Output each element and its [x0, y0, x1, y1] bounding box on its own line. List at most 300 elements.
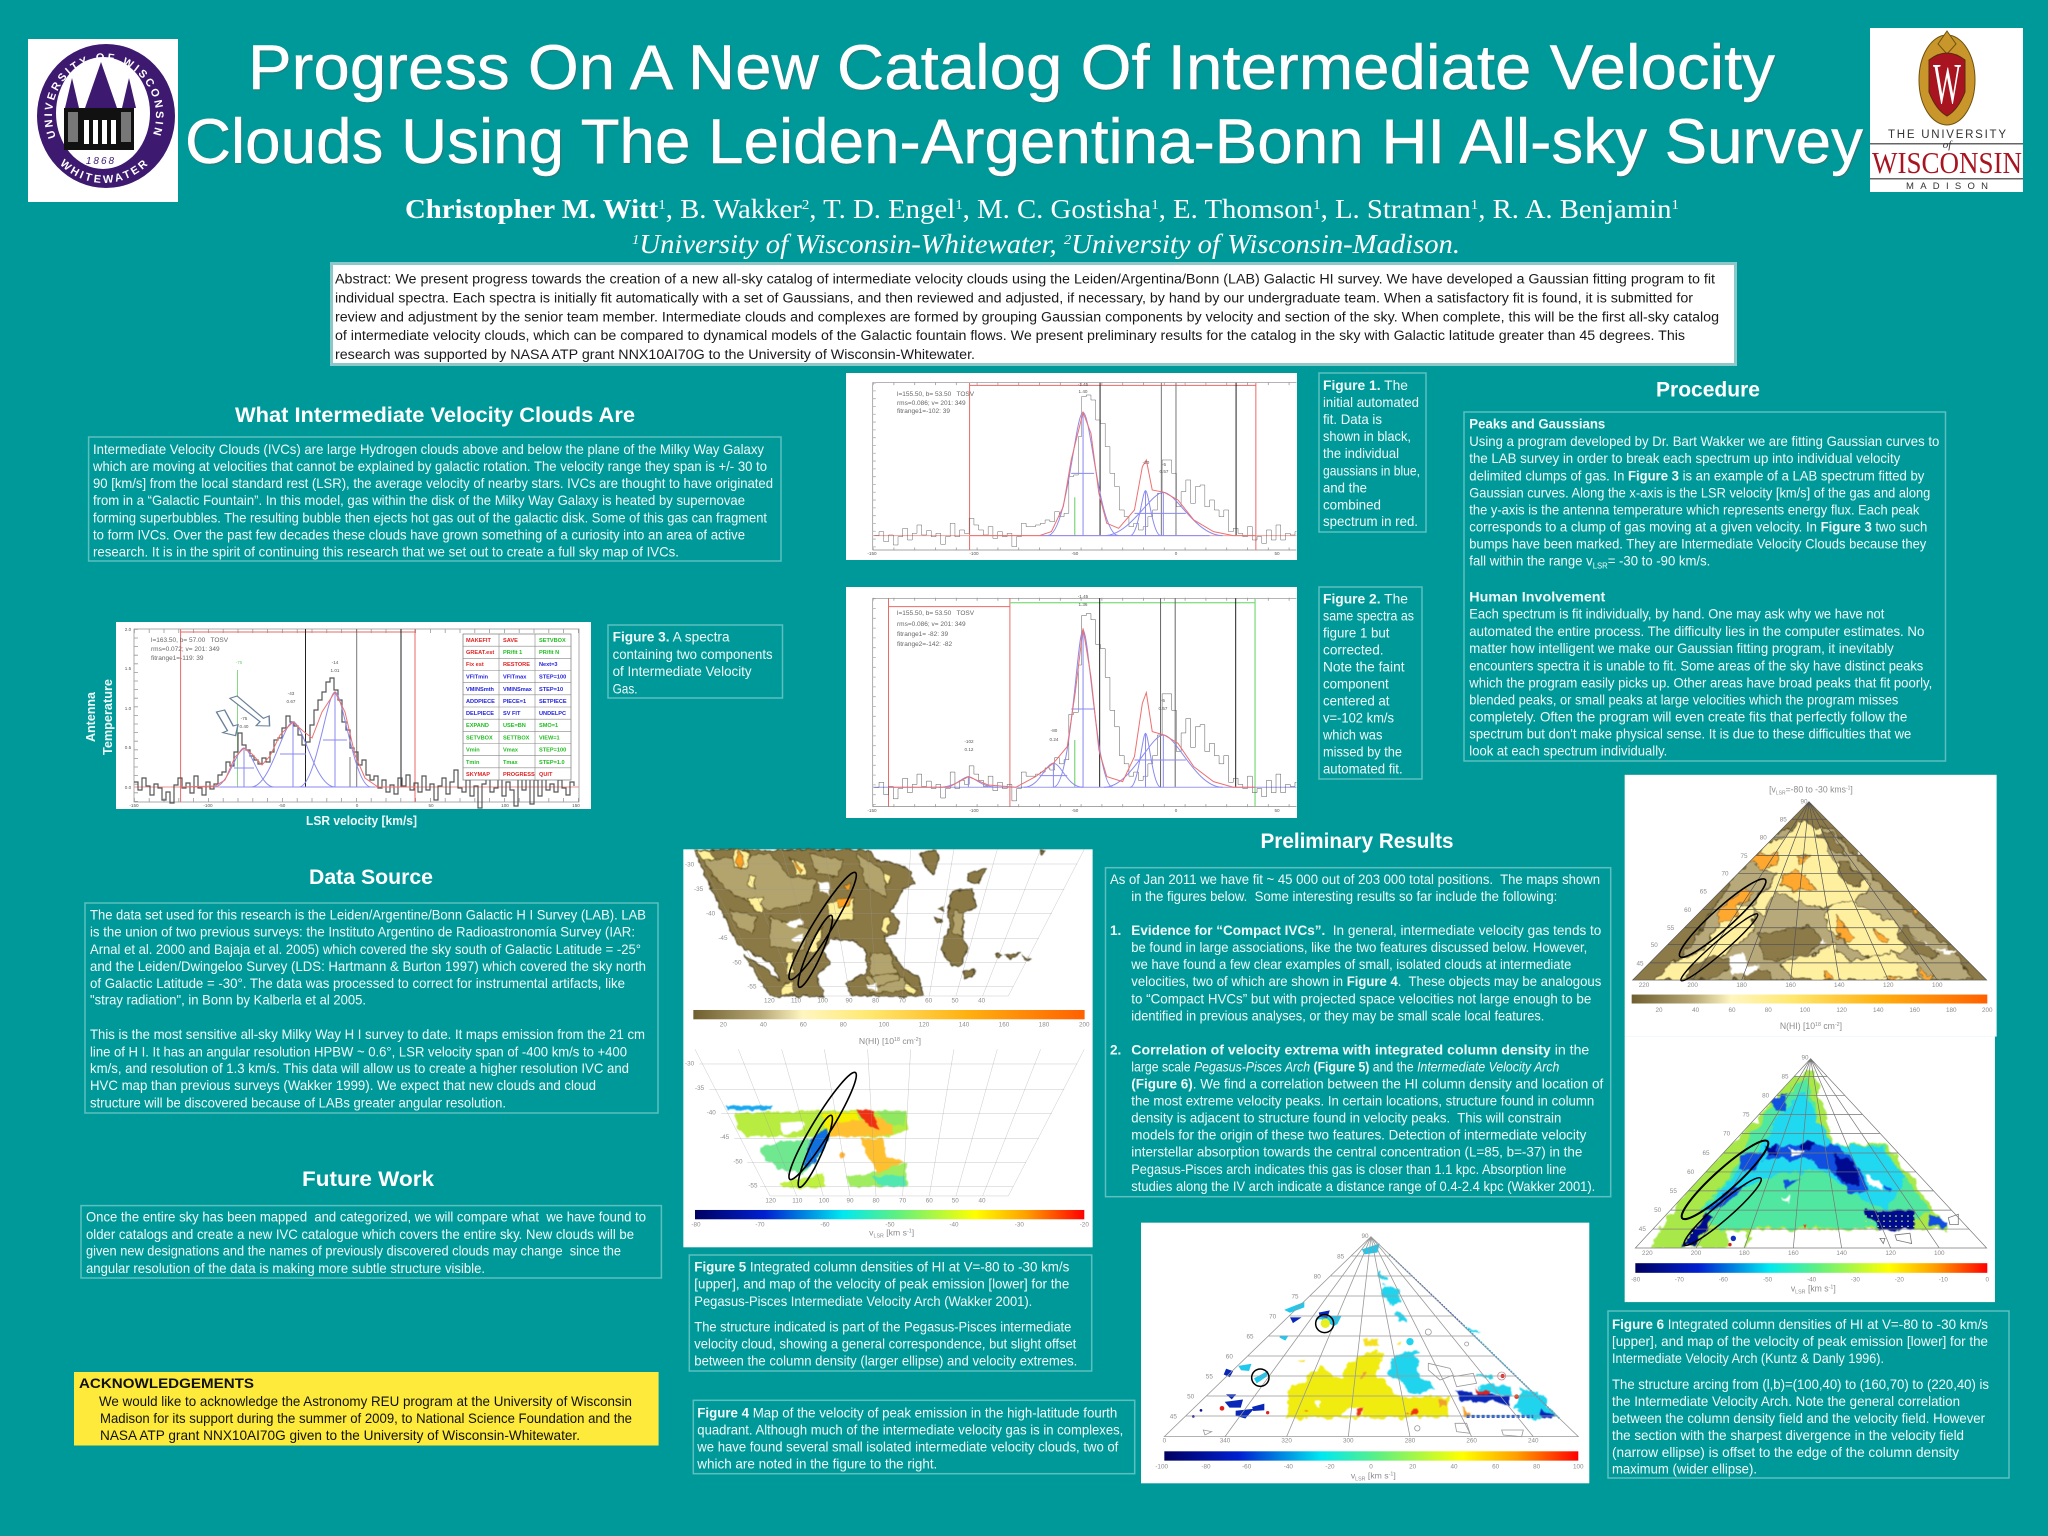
colorbar: velocity: -50	[885, 1222, 895, 1229]
colorbar: N(HI): ]	[1840, 1021, 1842, 1031]
caption: figure 5: [upper], and map of the velocity of peak emission [lower] for the	[694, 1277, 1069, 1292]
colorbar: N(HI): 120	[919, 1022, 930, 1029]
authors: 2	[802, 198, 809, 213]
caption: figure 6: Intermediate Velocity Arch (Kuntz & Danly 1996).	[1612, 1351, 1884, 1366]
map: N(HI) Intermediate Velocity Arch: 50	[1651, 942, 1658, 949]
title	[185, 33, 1864, 177]
map: peak velocity Intermediate Velocity Arch: 75	[1742, 1111, 1750, 1118]
colorbar: velocity: -1	[907, 1229, 912, 1235]
button table: Vmax	[503, 748, 519, 754]
colorbar: velocity: 0	[1986, 1276, 1989, 1283]
colorbar: N(HI): 60	[1728, 1007, 1736, 1014]
button table: UNDELPC	[539, 711, 566, 717]
caption: figure 6: the section with the sharpest divergence in the velocity field	[1612, 1428, 1964, 1443]
chart: figure 2 corrected fit spectrum: -1.45	[1078, 594, 1089, 599]
caption: figure 1: initial automated	[1323, 395, 1419, 410]
chart: figure 3 spectrum: rms=0.072; v= 201: 349	[151, 646, 220, 653]
button table: EXPAND	[466, 723, 489, 729]
button table: SKYMAP	[466, 772, 490, 778]
panel: preliminary results: we have found a few clear examples of small, isolated clouds at intermediate	[1130, 957, 1571, 972]
chart: figure 1 automated fit spectrum: -20	[1143, 460, 1150, 465]
panel: future work: angular resolution of the data is making more subtle structure visible.	[86, 1261, 485, 1276]
axis label: LSR velocity: LSR velocity [km/s]	[306, 814, 417, 828]
button table: PIECE=1	[503, 699, 526, 705]
map: peak velocity, Pegasus-Pisces: 40	[978, 1198, 986, 1205]
map: peak velocity Intermediate Velocity Arch: 90	[1801, 1055, 1809, 1062]
colorbar: N(HI): 160	[1909, 1007, 1920, 1014]
colorbar: N(HI): 140	[959, 1022, 970, 1029]
chart: figure 3 spectrum	[116, 622, 591, 809]
map: peak velocity Intermediate Velocity Arch: 140	[1836, 1250, 1847, 1257]
button table: Next=3	[539, 662, 558, 668]
panel: preliminary results: studies along the IV arch indicate a distance range of 0.4-2.4 kpc (Wakker 2001).	[1131, 1179, 1595, 1194]
panel: what IVCs are: from in a “Galactic Fountain”. In this model, gas within the disk of the Milky Way Galaxy is heated by supernovae	[93, 493, 745, 508]
button table: MAKEFIT	[466, 638, 491, 644]
caption: figure 3: containing two components	[613, 647, 773, 662]
map data blobs	[1283, 1270, 1558, 1418]
colorbar: N(HI): N(HI) [10	[1780, 1021, 1815, 1031]
panel: procedure: the LAB survey in order to break each spectrum up into individual velocity	[1469, 451, 1900, 466]
labels: 260	[1466, 1438, 1477, 1445]
colorbar: velocity: -40	[1284, 1463, 1293, 1470]
caption: figure 3	[608, 625, 782, 698]
colorbar: N(HI): 20	[720, 1022, 727, 1029]
chart: figure 1 automated fit spectrum: -100	[969, 551, 979, 556]
colorbar: N(HI): 20	[1655, 1007, 1663, 1014]
caption: figure 2: same spectra as	[1323, 608, 1414, 623]
chart: figure 3 spectrum: -43	[288, 691, 295, 696]
panel: what IVCs are: Intermediate Velocity Clouds (IVCs) are large Hydrogen clouds above and below the plane of the Milky Way Galaxy	[93, 442, 764, 457]
colorbar: velocity: -80	[1201, 1463, 1211, 1470]
chart: figure 1 automated fit spectrum: -150	[867, 551, 877, 556]
panel: abstract: research was supported by NASA ATP grant NNX10AI70G to the University of Wisconsin-Whitewater.	[335, 347, 975, 363]
colorbar: velocity: v	[869, 1228, 873, 1238]
chart: figure 2 corrected fit spectrum	[846, 587, 1312, 818]
button table: QUIT	[539, 772, 553, 778]
logo: University of Wisconsin-Madison crest: of	[1943, 139, 1953, 151]
panel: procedure: corresponds to a clump of gas moving at a given velocity. In Figure 3 two such	[1469, 520, 1927, 535]
colorbar: N(HI): 80	[1765, 1007, 1772, 1014]
caption: figure 2: figure 1 but	[1323, 625, 1390, 640]
map: N(HI) column density, Pegasus-Pisces: 110	[791, 998, 802, 1005]
colorbar: velocity: -50	[1763, 1276, 1773, 1283]
chart: figure 2 corrected fit spectrum: -5	[1161, 698, 1165, 703]
map title: [v	[1769, 784, 1776, 794]
authors: 1	[1672, 198, 1679, 213]
chart: figure 1 automated fit spectrum: l=155.50, b= 53.50 TOSV	[897, 391, 975, 398]
map: N(HI) Intermediate Velocity Arch: 100	[1932, 982, 1943, 989]
colorbar: N(HI): 160	[999, 1022, 1010, 1029]
button table: VMINSmth	[466, 687, 495, 693]
panel: procedure: Using a program developed by Dr. Bart Wakker we are fitting Gaussian curves to	[1469, 434, 1939, 449]
logo: University of Wisconsin-Madison crest: THE UNIVERSITY	[1888, 129, 2006, 141]
colorbar: N(HI): -2	[1835, 1022, 1840, 1028]
map title: =-80 to -30 kms	[1786, 784, 1847, 794]
map: peak velocity, Pegasus-Pisces: -40	[707, 1109, 716, 1116]
title: Progress On A New Catalog Of Intermediate Velocity	[248, 33, 1776, 103]
chart: figure 3 spectrum: 0.40	[240, 724, 249, 729]
button table: SMO=1	[539, 723, 558, 729]
panel: preliminary results: density is adjacent to structure found in velocity peaks. This will constrain	[1131, 1111, 1561, 1126]
map: peak velocity Intermediate Velocity Arch: 220	[1642, 1250, 1653, 1257]
chart: figure 1 automated fit spectrum: 0	[1175, 551, 1178, 556]
map: peak velocity Intermediate Velocity Arch: 55	[1670, 1188, 1677, 1195]
caption: figure 2: Note the faint	[1323, 659, 1405, 674]
caption: figure 6	[1608, 1311, 2009, 1478]
authors: , R. A. Benjamin	[1478, 194, 1672, 224]
panel: data source: is the union of two previous surveys: the Instituto Argentino de Radioastronomía Survey (IAR:	[90, 924, 635, 940]
panel: preliminary results: in the figures below. Some interesting results so far include the following:	[1131, 889, 1557, 904]
chart: figure 3 spectrum: -150	[129, 803, 139, 808]
panel: procedure: which the program easily picks up. Other areas have broad peaks that fit poorly,	[1468, 675, 1932, 690]
panel: preliminary results	[1106, 868, 1611, 1197]
button table: SV FIT	[503, 711, 521, 717]
button table: SETVBOX	[466, 736, 493, 742]
panel: what IVCs are: 90 [km/s] from the local standard rest (LSR), the average velocity of nearby stars. IVCs are thought to have originated	[93, 476, 773, 491]
caption: figure 4: quadrant. Although much of the intermediate velocity gas is in complexes,	[697, 1423, 1123, 1438]
button table: DELPIECE	[466, 711, 494, 717]
caption: figure 5: Pegasus-Pisces Intermediate Velocity Arch (Wakker 2001).	[694, 1294, 1032, 1309]
map: peak velocity, Pegasus-Pisces: 50	[952, 1198, 959, 1205]
chart: figure 3 spectrum: 1.0	[125, 706, 132, 711]
map: peak velocity Intermediate Velocity Arch: 160	[1788, 1250, 1799, 1257]
panel: procedure: blended peaks, or small peaks at large velocities which the program misses	[1469, 692, 1898, 707]
map: peak velocity Intermediate Velocity Arch: 85	[1781, 1074, 1789, 1081]
chart: figure 2 corrected fit spectrum: rms=0.086; v= 201: 349	[897, 621, 966, 628]
chart: figure 2 corrected fit spectrum: l=155.50, b= 53.50 TOSV	[897, 610, 975, 617]
panel: data source: and the Leiden/Dwingeloo Survey (LDS: Hartmann & Burton 1997) which covered the sky north	[90, 959, 646, 974]
chart: figure 2 corrected fit spectrum: fitrange2=-142: -82	[897, 641, 952, 648]
map: peak velocity, Pegasus-Pisces: 90	[846, 1198, 854, 1205]
panel: acknowledgements	[74, 1372, 659, 1446]
logo: University of Wisconsin-Madison crest: W	[1933, 51, 1961, 116]
panel: procedure: Gaussian curves. Along the x-axis is the LSR velocity [km/s] of the gas and along	[1469, 485, 1930, 500]
caption: figure 2: missed by the	[1323, 745, 1402, 760]
map: N(HI) column density, Pegasus-Pisces: -55	[747, 984, 757, 991]
panel: procedure: Peaks and Gaussians	[1469, 416, 1605, 431]
chart: figure 1 automated fit spectrum: 1.40	[1079, 389, 1088, 394]
labels: 50	[1187, 1393, 1195, 1400]
map: N(HI) column density, Pegasus-Pisces: 40	[978, 998, 986, 1005]
chart: figure 1 automated fit spectrum: -50	[1072, 551, 1079, 556]
colorbar: velocity	[1155, 1451, 1584, 1482]
colorbar: N(HI): 100	[879, 1022, 890, 1029]
logo: University of Wisconsin-Whitewater seal	[28, 39, 178, 202]
colorbar: velocity: 20	[1409, 1463, 1417, 1470]
map title: LSR	[1776, 790, 1786, 796]
map: peak velocity, Pegasus-Pisces: 100	[819, 1198, 830, 1205]
caption: figure 4: we have found several small isolated intermediate velocity clouds, two of	[696, 1440, 1119, 1455]
panel: preliminary results: the most extreme velocity peaks. In certain locations, structure found in column	[1131, 1094, 1594, 1109]
panel: abstract: individual spectra. Each spectra is initially fit automatically with a set of Gaussians, and then reviewed and adjusted, if necessary, by hand by our undergraduate team. When a satisfactory fit is found, it is submitted for	[335, 290, 1693, 306]
authors: 1	[1151, 198, 1159, 213]
panel: procedure: Human Involvement	[1469, 590, 1606, 605]
logo: University of Wisconsin-Madison crest: WISCONSIN	[1872, 145, 2022, 180]
panel: procedure: bumps have been marked. They are Intermediate Velocity Clouds because they	[1469, 537, 1926, 552]
colorbar: velocity: -70	[1675, 1276, 1684, 1283]
colorbar: velocity: -20	[1895, 1276, 1904, 1283]
panel: what IVCs are: which are moving at velocities that cannot be explained by galactic rotation. The velocity range they span is +/- 30 to	[92, 459, 767, 474]
chart: figure 1 automated fit spectrum: rms=0.086; v= 201: 349	[897, 400, 966, 407]
chart: figure 3 spectrum: 150	[572, 803, 580, 808]
map: peak velocity Intermediate Velocity Arch: 80	[1762, 1092, 1770, 1100]
affiliations: 1	[632, 233, 639, 248]
button table: Vmin	[466, 748, 480, 754]
panel: acknowledgements: We would like to acknowledge the Astronomy REU program at the University of Wisconsin	[99, 1394, 632, 1409]
map: peak velocity Intermediate Velocity Arch: 180	[1739, 1250, 1750, 1257]
affiliations: University of Wisconsin-Madison.	[1071, 229, 1460, 259]
colorbar: velocity: -20	[1325, 1463, 1335, 1470]
panel: preliminary results: velocities, two of which are shown in Figure 4. These objects may be analogous	[1131, 974, 1601, 989]
button table: VFITmax	[503, 675, 527, 681]
map: peak velocity, Pegasus-Pisces: 70	[899, 1198, 907, 1205]
heading: Future Work: Future Work	[302, 1168, 434, 1191]
map: peak velocity Intermediate Velocity Arch	[1635, 1055, 1987, 1257]
labels	[1163, 1233, 1539, 1445]
chart: figure 3 spectrum: -100	[203, 803, 213, 808]
caption: figure 3: Gas.	[613, 681, 638, 696]
chart: figure 6 maps	[1625, 775, 1997, 1302]
map: N(HI) column density, Pegasus-Pisces: 70	[899, 998, 906, 1005]
chart: figure 1 automated fit spectrum: fitrange1=-102: 39	[897, 408, 950, 415]
panel: preliminary results: models for the origin of these two features. Detection of intermediate velocity	[1131, 1128, 1586, 1143]
panel: what IVCs are	[89, 437, 781, 561]
chart: figure 2 corrected fit spectrum: fitrange1= -82: 39	[897, 631, 949, 638]
panel: preliminary results: (Figure 6). We find a correlation between the HI column density and location of	[1131, 1077, 1604, 1092]
caption: figure 2: centered at	[1323, 694, 1390, 709]
chart: figure 1 automated fit spectrum: 0.57	[1160, 469, 1169, 474]
colorbar: velocity: -40	[1807, 1276, 1817, 1283]
button table: PR/fit 1	[503, 650, 522, 656]
authors: 1	[955, 198, 963, 213]
colorbar: velocity: 100	[1573, 1463, 1584, 1470]
colorbar: N(HI): 40	[760, 1022, 767, 1029]
colorbar: N(HI)	[1632, 995, 1993, 1031]
map: peak velocity Intermediate Velocity Arch: 70	[1723, 1130, 1731, 1137]
map: N(HI) Intermediate Velocity Arch	[1633, 798, 1987, 989]
panel: procedure: LSR	[1593, 562, 1608, 571]
map: peak velocity, Pegasus-Pisces	[685, 1049, 1084, 1205]
map: N(HI) Intermediate Velocity Arch: 55	[1667, 925, 1675, 932]
colorbar: velocity: -60	[820, 1222, 830, 1229]
panel: acknowledgements: Madison for its support during the summer of 2009, to National Science Foundation and the	[100, 1411, 632, 1426]
logo: University of Wisconsin-Madison crest: MADISON	[1906, 181, 1988, 192]
authors: 1	[1471, 198, 1478, 213]
colorbar: N(HI): 200	[1079, 1022, 1090, 1029]
colorbar: N(HI): cm	[1821, 1021, 1835, 1031]
grid	[1164, 1237, 1578, 1437]
panel: preliminary results: Correlation of velocity extrema with integrated column density in the	[1131, 1042, 1589, 1057]
panel: data source: of Galactic Latitude = -30°. The data was processed to correct for instrumental artifacts, like	[90, 976, 625, 991]
colorbar: N(HI): 60	[800, 1022, 807, 1029]
panel: acknowledgements: NASA ATP grant NNX10AI70G given to the University of Wisconsin-Whitewater.	[100, 1428, 580, 1443]
authors: , B. Wakker	[666, 194, 802, 224]
colorbar: N(HI): 18	[894, 1037, 900, 1043]
map: peak velocity Intermediate Velocity Arch: 50	[1654, 1207, 1662, 1214]
chart: figure 3 spectrum: 1.01	[331, 668, 340, 673]
chart: figure 3 spectrum: -75	[241, 716, 248, 721]
caption: figure 6: between the column density field and the velocity field. However	[1612, 1411, 1985, 1426]
chart: figure 2 corrected fit spectrum: -50	[1072, 808, 1079, 813]
panel: data source: HVC map than previous surveys (Wakker 1999). We expect that new clouds and cloud	[90, 1078, 596, 1093]
colorbar: velocity: -1	[1389, 1471, 1393, 1477]
colorbar: velocity: 40	[1450, 1463, 1458, 1470]
panel: preliminary results: 2.	[1110, 1042, 1121, 1057]
chart: figure 3 spectrum: -14	[332, 660, 339, 665]
colorbar: velocity: ]	[912, 1228, 914, 1238]
labels: 55	[1206, 1373, 1213, 1380]
colorbar: N(HI): cm	[900, 1036, 914, 1046]
authors: , E. Thomson	[1159, 194, 1314, 224]
chart: figure 3 spectrum: fitrange1=-119: 39	[151, 655, 204, 662]
button table: SETVBOX	[539, 638, 566, 644]
button table	[463, 634, 571, 780]
button table: STEP=10	[539, 687, 563, 693]
logo: University of Wisconsin-Madison crest	[1870, 28, 2023, 192]
colorbar: velocity: -60	[1719, 1276, 1728, 1283]
panel: what IVCs are: forming superbubbles. The resulting bubble then ejects hot gas out of the galactic disk. Some of this gas can fragment	[93, 510, 767, 525]
panel: data source: Arnal et al. 2000 and Bajaja et al. 2005) which covered the sky south of Galactic Latitude = -25°	[90, 942, 641, 957]
button table: Tmax	[503, 760, 519, 766]
chart: figure 2 corrected fit spectrum: 0.24	[1050, 737, 1059, 742]
colorbar: N(HI): ]	[919, 1036, 921, 1046]
panel: future work: given new designations and the names of previously discovered clouds may change since the	[86, 1244, 621, 1259]
chart: figure 3 spectrum: -75	[236, 660, 243, 665]
panel: procedure	[1464, 412, 1946, 761]
colorbar: N(HI): 120	[1836, 1007, 1847, 1014]
caption: figure 5: Figure 5 Integrated column densities of HI at V=-80 to -30 km/s	[694, 1260, 1069, 1275]
button table: SETPIECE	[539, 699, 567, 705]
panel: procedure: spectrum but don't make physical sense. It is due to these difficulties that we	[1469, 726, 1911, 741]
chart: figure 2 corrected fit spectrum: -150	[867, 808, 877, 813]
logo: University of Wisconsin-Whitewater seal: WHITEWATER	[61, 158, 148, 183]
caption: figure 1: Figure 1. The	[1323, 378, 1408, 393]
caption: figure 5: between the column density (larger ellipse) and velocity extremes.	[694, 1354, 1077, 1369]
labels: 85	[1337, 1253, 1345, 1260]
panel: procedure: completely. Often the program will even create fits that perfectly follow the	[1469, 710, 1907, 725]
chart: figure 2 corrected fit spectrum: -102	[964, 739, 974, 744]
map: peak velocity, Pegasus-Pisces: 110	[792, 1198, 803, 1205]
labels: 70	[1269, 1313, 1277, 1320]
colorbar: velocity: -80	[691, 1222, 701, 1229]
chart: figure 3 spectrum: 100	[501, 803, 509, 808]
map: N(HI) Intermediate Velocity Arch: 75	[1740, 853, 1748, 860]
colorbar: velocity: LSR	[1355, 1476, 1366, 1482]
heading: Data Source: Data Source	[309, 866, 433, 889]
panel: preliminary results: As of Jan 2011 we have fit ~ 45 000 out of 203 000 total positions. The maps shown	[1110, 872, 1600, 887]
map: peak velocity Intermediate Velocity Arch: 45	[1639, 1226, 1646, 1233]
colorbar: velocity: -30	[1015, 1222, 1024, 1229]
colorbar: velocity: v	[1351, 1470, 1355, 1480]
map title: ]	[1850, 784, 1853, 794]
map: peak velocity, Pegasus-Pisces: 120	[765, 1198, 776, 1205]
button table: ADDPIECE	[466, 699, 495, 705]
map: peak velocity Intermediate Velocity Arch: 100	[1934, 1250, 1945, 1257]
button table: RESTORE	[503, 662, 530, 668]
button table: SETTBOX	[503, 736, 530, 742]
colorbar: N(HI): 40	[1692, 1007, 1700, 1014]
title: Clouds Using The Leiden-Argentina-Bonn HI All-sky Survey	[185, 107, 1864, 177]
panel: preliminary results: large scale Pegasus-Pisces Arch (Figure 5) and the Intermediate Velocity Arch	[1131, 1059, 1559, 1074]
caption: figure 3: Figure 3. A spectra	[613, 630, 730, 645]
map: peak velocity Intermediate Velocity Arch: 200	[1691, 1250, 1702, 1257]
panel: future work: older catalogs and create a new IVC catalogue which covers the entire sky. New clouds will be	[86, 1227, 634, 1242]
colorbar: velocity: -80	[1631, 1276, 1641, 1283]
map: peak velocity Intermediate Velocity Arch: 65	[1702, 1150, 1710, 1157]
colorbar: N(HI): -2	[914, 1037, 919, 1043]
colorbar: velocity: 60	[1492, 1463, 1500, 1470]
chart: figure 3 spectrum: 0.67	[287, 699, 296, 704]
colorbar: velocity: -10	[1939, 1276, 1948, 1283]
panel: procedure: delimited clumps of gas. In Figure 3 is an example of a LAB spectrum fitted by	[1469, 468, 1924, 483]
chart: figure 1 automated fit spectrum	[846, 373, 1312, 560]
labels: 0	[1163, 1438, 1167, 1445]
highlight circles	[1316, 1315, 1334, 1333]
map: peak velocity, Pegasus-Pisces: -45	[720, 1134, 730, 1141]
colorbar: N(HI): 180	[1039, 1022, 1050, 1029]
map title: -1	[1846, 785, 1851, 791]
authors: Christopher M. Witt	[405, 194, 658, 224]
colorbar: velocity: -30	[1851, 1276, 1860, 1283]
panel: data source: "stray radiation", in Bonn by Kalberla et al 2005.	[90, 993, 366, 1008]
panel: procedure: Each spectrum is fit individually, by hand. One may ask why we have not	[1469, 607, 1885, 622]
labels: 60	[1226, 1353, 1233, 1360]
button table: VIEW=1	[539, 736, 560, 742]
caption: figure 5: The structure indicated is part of the Pegasus-Pisces intermediate	[694, 1320, 1071, 1335]
panel: procedure: encounters spectra it is unable to fit. Some areas of the sky have distinct peaks	[1469, 658, 1923, 673]
authors: 1	[658, 198, 666, 213]
panel: what IVCs are: to form IVCs. Over the past few decades these clouds have grown something of a curiosity into an area of active	[93, 527, 745, 542]
caption: figure 1: and the	[1323, 480, 1367, 495]
colorbar: velocity: [km s	[1366, 1470, 1389, 1480]
caption: figure 6: Figure 6 Integrated column densities of HI at V=-80 to -30 km/s	[1612, 1317, 1988, 1332]
map: N(HI) column density, Pegasus-Pisces: 100	[817, 998, 828, 1005]
chart: figure 1 automated fit spectrum: -1.45	[1078, 382, 1089, 387]
axis label: antenna temperature: Antenna	[84, 691, 98, 742]
button table: Fix est	[466, 662, 484, 668]
map: N(HI) Intermediate Velocity Arch: 90	[1800, 798, 1808, 805]
panel: procedure: automated the entire process. The difficulty lies in the computer estimates. No	[1469, 624, 1924, 639]
chart: figure 3 spectrum: 0	[356, 803, 359, 808]
colorbar: velocity: [km s	[1806, 1283, 1829, 1293]
colorbar: velocity: -1	[1829, 1284, 1833, 1290]
labels: 65	[1246, 1333, 1254, 1340]
colorbar: velocity: -60	[1242, 1463, 1252, 1470]
chart: figure 3 spectrum: l=163.50, b= 57.00 TOSV	[151, 637, 229, 644]
caption: figure 1: the individual	[1323, 446, 1399, 461]
chart: figure 2 corrected fit spectrum: 0.57	[1159, 706, 1168, 711]
logo: University of Wisconsin-Whitewater seal: UNIVERSITY OF WISCONSIN	[44, 53, 164, 139]
button table: SAVE	[503, 638, 518, 644]
heading: Procedure: Procedure	[1656, 379, 1760, 402]
labels: 340	[1220, 1438, 1231, 1445]
axis label: antenna temperature: Temperature	[101, 679, 115, 755]
map: peak velocity, Pegasus-Pisces: -50	[733, 1158, 743, 1165]
caption: figure 6: the Intermediate Velocity Arch. Note the general correlation	[1612, 1394, 1960, 1409]
map: N(HI) Intermediate Velocity Arch: 85	[1780, 817, 1787, 824]
map: N(HI) column density, Pegasus-Pisces: 120	[764, 998, 775, 1005]
caption: figure 6: The structure arcing from (l,b)=(100,40) to (160,70) to (220,40) is	[1612, 1377, 1989, 1392]
chart: figure 1 automated fit spectrum: -5	[1162, 462, 1166, 467]
logo: University of Wisconsin-Whitewater seal: 1868	[86, 156, 116, 167]
panel: future work: Once the entire sky has been mapped and categorized, we will compare what we have found to	[86, 1210, 646, 1225]
labels: 300	[1343, 1438, 1354, 1445]
heading: What Intermediate Velocity Clouds Are: What Intermediate Velocity Clouds Are	[235, 404, 635, 427]
labels: 280	[1405, 1438, 1416, 1445]
colorbar: N(HI)	[693, 1010, 1090, 1046]
map: N(HI) Intermediate Velocity Arch: 60	[1684, 907, 1692, 914]
panel: procedure: fall within the range v	[1469, 554, 1597, 569]
